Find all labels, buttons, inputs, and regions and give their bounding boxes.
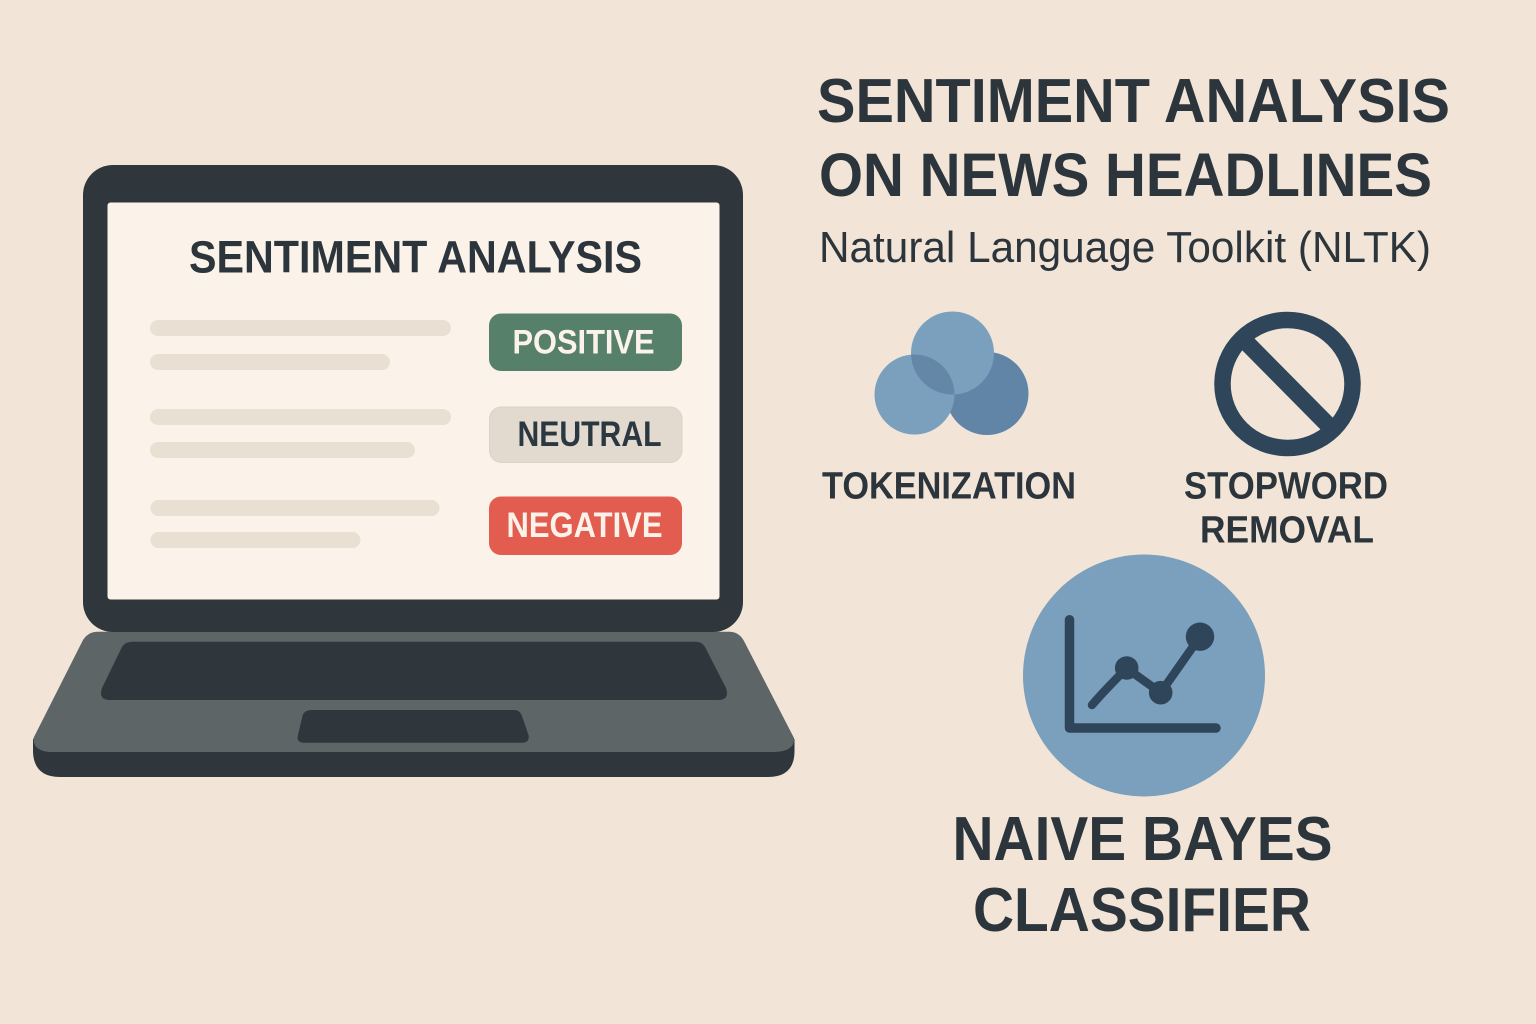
neutral badge: NEUTRAL <box>518 415 662 454</box>
naive bayes classifier label <box>952 805 1332 945</box>
stopword removal label: REMOVAL <box>1200 510 1374 552</box>
icon: stopword prohibition sign <box>1222 320 1352 448</box>
main title <box>817 67 1450 209</box>
negative badge: NEGATIVE <box>506 506 662 545</box>
headline row 2 placeholder lines <box>150 409 451 458</box>
tokenization label: TOKENIZATION <box>822 466 1076 508</box>
naive bayes classifier label: NAIVE BAYES <box>952 805 1332 874</box>
naive bayes classifier label: CLASSIFIER <box>973 876 1311 945</box>
positive badge: POSITIVE <box>512 323 654 361</box>
laptop base <box>33 632 794 777</box>
laptop illustration <box>33 165 794 777</box>
laptop screen <box>108 202 720 600</box>
headline row 3 placeholder lines <box>150 500 440 548</box>
stopword removal label <box>1184 466 1388 552</box>
icon: tokenization circles <box>874 312 1028 435</box>
stopword removal label: STOPWORD <box>1184 466 1388 508</box>
negative badge <box>489 496 682 555</box>
screen heading: SENTIMENT ANALYSIS <box>189 232 642 282</box>
main title: SENTIMENT ANALYSIS <box>817 67 1450 136</box>
positive badge <box>489 314 682 371</box>
main title: ON NEWS HEADLINES <box>819 141 1432 209</box>
icon: naive bayes chart circle <box>1023 554 1265 796</box>
laptop screen bezel <box>83 165 743 632</box>
neutral badge <box>490 407 682 462</box>
subtitle: Natural Language Toolkit (NLTK) <box>819 224 1431 272</box>
headline row 1 placeholder lines <box>150 320 451 370</box>
